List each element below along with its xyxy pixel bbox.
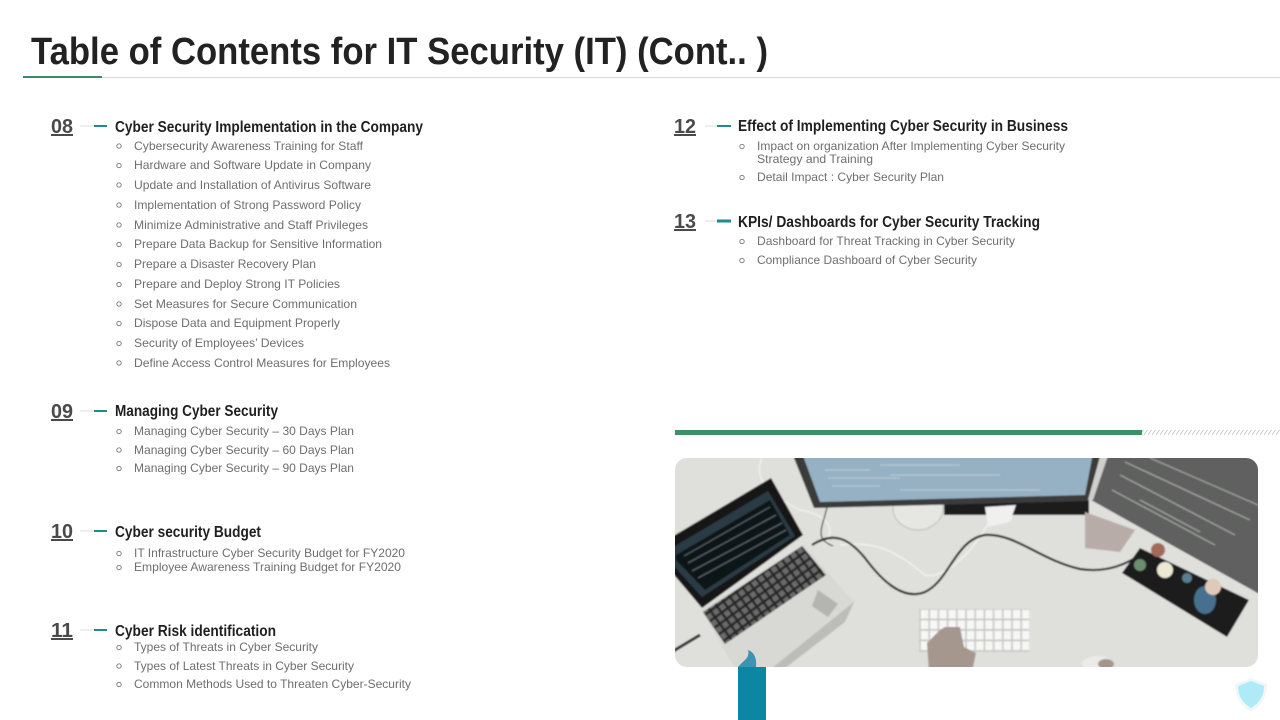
section 08: Prepare Data Backup for Sensitive Information: [134, 237, 382, 251]
section 11: Types of Threats in Cyber Security: [134, 640, 318, 654]
section 10: Employee Awareness Training Budget for FY2020: [134, 560, 401, 574]
section 13: Compliance Dashboard of Cyber Security: [757, 253, 977, 267]
section 08: 08: [51, 116, 73, 138]
white keyboard: [919, 609, 1029, 652]
section 08: Prepare and Deploy Strong IT Policies: [134, 277, 340, 291]
icon: shield: [1235, 678, 1267, 712]
section 08: Dispose Data and Equipment Properly: [134, 316, 340, 330]
section 13: 13: [674, 211, 696, 233]
section 10: [51, 521, 405, 574]
title: Table of Contents for IT Security (IT) (Cont.. ): [31, 31, 768, 73]
section 08: Set Measures for Secure Communication: [134, 297, 357, 311]
section 09: Managing Cyber Security – 90 Days Plan: [134, 461, 354, 475]
section 11: [51, 620, 411, 691]
section 09: Managing Cyber Security – 30 Days Plan: [134, 424, 354, 438]
progress bar divider: [675, 430, 1280, 435]
section 08: [51, 116, 423, 370]
section 11: Cyber Risk identification: [115, 623, 276, 640]
section 12: Impact on organization After Implementing Cyber Security: [757, 139, 1065, 153]
section 12: Effect of Implementing Cyber Security in Business: [738, 118, 1068, 135]
section 08: Prepare a Disaster Recovery Plan: [134, 257, 316, 271]
section 11: Types of Latest Threats in Cyber Security: [134, 659, 354, 673]
section 13: KPIs/ Dashboards for Cyber Security Tracking: [738, 214, 1040, 231]
section 10: Cyber security Budget: [115, 524, 261, 541]
laptop screen: [670, 478, 803, 608]
section 09: Managing Cyber Security – 60 Days Plan: [134, 443, 354, 457]
section 09: [51, 401, 354, 475]
plant tray: [1122, 548, 1249, 637]
section 11: Common Methods Used to Threaten Cyber-Security: [134, 677, 411, 691]
section 10: IT Infrastructure Cyber Security Budget for FY2020: [134, 546, 405, 560]
section 10: 10: [51, 521, 73, 543]
right monitor: [1091, 453, 1263, 596]
section 08: Minimize Administrative and Staff Privileges: [134, 218, 368, 232]
teal accent block: [738, 650, 766, 720]
section 12: Detail Impact : Cyber Security Plan: [757, 170, 944, 184]
section 08: Cybersecurity Awareness Training for Staff: [134, 139, 364, 153]
section 08: Update and Installation of Antivirus Software: [134, 178, 371, 192]
section 12: [674, 116, 1068, 184]
section 12: Strategy and Training: [757, 152, 873, 166]
main cable: [812, 535, 1140, 594]
section 11: 11: [51, 620, 73, 642]
hands: [927, 627, 976, 672]
section 13: Dashboard for Threat Tracking in Cyber Security: [757, 234, 1015, 248]
section 08: Security of Employees’ Devices: [134, 336, 304, 350]
section 13: [674, 211, 1040, 267]
section 08: Implementation of Strong Password Policy: [134, 198, 361, 212]
photo: desk with laptop and monitors: [670, 453, 1263, 672]
laptop base: [701, 545, 854, 672]
section 08: Define Access Control Measures for Employees: [134, 356, 390, 370]
header rule: [23, 76, 1280, 78]
center monitor: [792, 453, 1101, 508]
section 12: 12: [674, 116, 696, 138]
section 08: Cyber Security Implementation in the Company: [115, 119, 423, 136]
section 08: Hardware and Software Update in Company: [134, 158, 371, 172]
section 09: Managing Cyber Security: [115, 403, 278, 420]
section 09: 09: [51, 401, 73, 423]
